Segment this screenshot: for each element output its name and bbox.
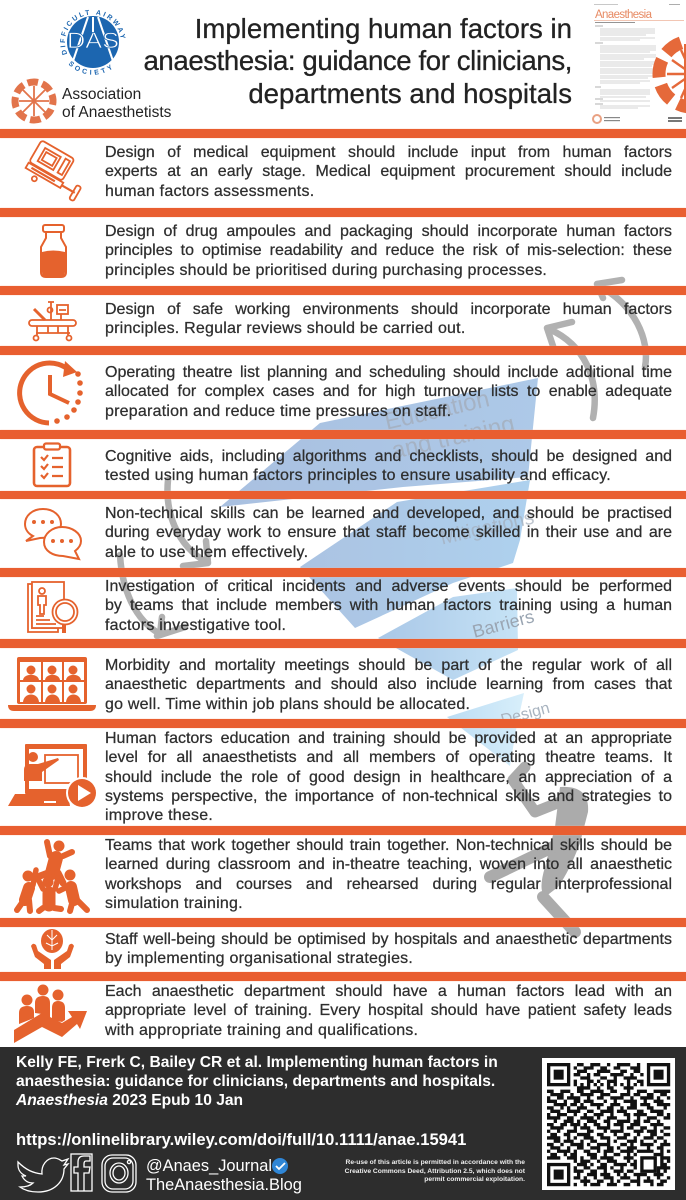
title: departments and hospitals xyxy=(248,78,572,109)
social handles: TheAnaesthesia.Blog xyxy=(146,1176,302,1194)
icon: drug vial xyxy=(41,225,66,277)
recommendation 5: cognitive aids: tested using human factors principles to ensure usability and efficacy. xyxy=(105,467,611,484)
licence note: permit commercial exploitation. xyxy=(424,1176,525,1183)
icon: twitter bird xyxy=(18,1158,68,1192)
recommendation 10: teams train together: simulation training. xyxy=(105,895,243,912)
icon: syringe pump xyxy=(22,140,92,203)
recommendation 1: medical equipment: experts at an early stage. Medical equipment procurement should include xyxy=(105,163,672,180)
recommendation 2: drug ampoules: principles to optimise readability and reduce the risk of mis-selection: these xyxy=(105,242,672,259)
icon: brain in caring hands xyxy=(31,929,74,969)
recommendation 11: staff well-being: by implementing organisational strategies. xyxy=(105,950,413,967)
recommendation 6: non-technical skills: during everyday work to ensure that staff become skilled in their use and are xyxy=(105,524,672,541)
recommendation 6: non-technical skills xyxy=(105,505,672,561)
recommendation 10: teams train together xyxy=(104,837,672,912)
recommendation 4: list planning: preparation and reduce time pressures on staff. xyxy=(105,403,451,420)
icon: speech bubbles xyxy=(25,509,81,559)
social handles: @Anaes_Journal xyxy=(146,1157,272,1175)
recommendation 7: critical incidents: Investigation of critical incidents and adverse events should be performed xyxy=(105,578,672,595)
recommendation 5: cognitive aids xyxy=(105,448,672,484)
icon: laptop with presenter and play button xyxy=(8,744,98,809)
title xyxy=(143,13,572,110)
logo: Difficult Airway Society: DIFFICULT AIRWAY xyxy=(60,10,126,56)
logo text: Association of Anaesthetists xyxy=(62,86,171,120)
citation: Anaesthesia 2023 Epub 10 Jan xyxy=(16,1092,243,1109)
icon: clipboard checklist xyxy=(34,444,70,486)
recommendation 9: education and training: should include the role of good design in healthcare, an appreciation of a xyxy=(105,769,672,786)
recommendation 1: medical equipment xyxy=(105,144,672,200)
licence note xyxy=(344,1159,525,1183)
social handles xyxy=(146,1157,302,1194)
recommendation 8: morbidity and mortality meetings: anaesthetic departments and should also include learning from cases that xyxy=(105,676,672,693)
icon: investigation document and magnifier xyxy=(28,582,78,633)
QR code xyxy=(542,1058,675,1190)
recommendation 12: human factors lead: with appropriate training and qualifications. xyxy=(105,1022,418,1039)
recommendation 6: non-technical skills: able to use them effectively. xyxy=(105,544,308,561)
title: anaesthesia: guidance for clinicians, xyxy=(143,45,572,76)
recommendation 3: working environments: Design of safe working environments should incorporate human factors xyxy=(105,301,672,318)
title: Implementing human factors in xyxy=(195,13,572,44)
logo: Association of Anaesthetists mark xyxy=(10,77,58,125)
icon: team with rising arrow xyxy=(14,984,87,1043)
recommendation 1: medical equipment: human factors assessments. xyxy=(105,183,314,200)
logo: Difficult Airway Society xyxy=(60,10,126,75)
recommendation 7: critical incidents: factors investigative tool. xyxy=(105,617,286,634)
recommendation 9: education and training: improve these. xyxy=(105,807,213,824)
recommendation 9: education and training: systems perspective, the importance of non-technical skills and strategies to xyxy=(105,788,672,805)
recommendation 8: morbidity and mortality meetings xyxy=(105,657,672,713)
recommendation 2: drug ampoules: principles should be prioritised during purchasing processes. xyxy=(105,262,547,279)
icon: instagram xyxy=(102,1155,136,1192)
recommendation 1: medical equipment: Design of medical equipment should include input from human factors xyxy=(105,144,672,161)
journal cover thumbnail: Anaesthesia xyxy=(595,9,653,21)
article link: https://onlinelibrary.wiley.com/doi/full/10.1111/anae.15941 xyxy=(16,1130,466,1149)
icon: hospital bed xyxy=(29,302,76,340)
licence note: Re-use of this article is permitted in accordance with the xyxy=(346,1159,525,1166)
recommendation 3: working environments: principles. Regular reviews should be carried out. xyxy=(105,320,466,337)
logo text: Association of Anaesthetists: Association xyxy=(62,86,141,103)
recommendation 12: human factors lead: Each anaesthetic department should have a human factors lead with an xyxy=(105,983,672,1000)
recommendation 9: education and training: Human factors education and training should be provided at an appropriate xyxy=(105,730,672,747)
background graphic: blue chevrons and grey arrows: Education xyxy=(382,385,492,436)
background graphic: blue chevrons and grey arrows: and training xyxy=(389,410,517,465)
background graphic: blue chevrons and grey arrows: Mitigations xyxy=(438,507,536,549)
recommendation 9: education and training: level for all anaesthetists and all members of operating theatre teams. It xyxy=(105,749,672,766)
recommendation 4: list planning: Operating theatre list planning and scheduling should include additional time xyxy=(105,364,672,381)
logo: Difficult Airway Society: SOCIETY xyxy=(68,61,112,75)
background graphic: blue chevrons and grey arrows: Design xyxy=(499,700,552,729)
recommendation 6: non-technical skills: Non-technical skills can be learned and developed, and should be practised xyxy=(105,505,672,522)
recommendation 3: working environments xyxy=(105,301,672,337)
recommendation 2: drug ampoules xyxy=(105,223,672,279)
footer panel xyxy=(0,1047,686,1200)
recommendation 7: critical incidents: by teams that include members with human factors training using a human xyxy=(105,597,672,614)
recommendation 12: human factors lead: appropriate level of training. Every hospital should have patient safety leads xyxy=(105,1002,672,1019)
recommendation 8: morbidity and mortality meetings: go well. Time within job plans should be allocated. xyxy=(105,696,470,713)
recommendation 9: education and training xyxy=(105,730,672,824)
icon: team human pyramid xyxy=(17,840,87,911)
icon: verified badge xyxy=(272,1158,288,1174)
recommendation 10: teams train together: learned during classroom and in-theatre teaching, woven into all anaesthetic xyxy=(105,856,672,873)
recommendation 4: list planning: allocated for complex cases and for high turnover lists to enable adequate xyxy=(105,383,672,400)
citation: Kelly FE, Frerk C, Bailey CR et al. Implementing human factors in xyxy=(16,1054,498,1071)
background graphic: blue chevrons and grey arrows: Barriers xyxy=(470,606,536,642)
recommendation 7: critical incidents xyxy=(105,578,672,634)
recommendation 11: staff well-being xyxy=(105,931,672,967)
recommendation 11: staff well-being: Staff well-being should be optimised by hospitals and anaesthetic departments xyxy=(105,931,672,948)
recommendation 12: human factors lead xyxy=(104,983,672,1039)
recommendation 4: list planning xyxy=(105,364,672,420)
icon: laptop with video grid xyxy=(8,657,96,711)
icon: facebook xyxy=(71,1154,92,1191)
icon: clock with time arrow xyxy=(20,361,83,424)
citation xyxy=(16,1054,498,1109)
logo: Difficult Airway Society: DAS xyxy=(67,28,119,53)
recommendation 8: morbidity and mortality meetings: Morbidity and mortality meetings should be part of the regular work of all xyxy=(105,657,672,674)
recommendation 5: cognitive aids: Cognitive aids, including algorithms and checklists, should be designed and xyxy=(105,448,672,465)
recommendation 10: teams train together: workshops and courses and rehearsed during regular interprofessional xyxy=(105,876,672,893)
logo text: Association of Anaesthetists: of Anaesthetists xyxy=(62,104,171,120)
citation: anaesthesia: guidance for clinicians, departments and hospitals. xyxy=(16,1073,495,1090)
recommendation 10: teams train together: Teams that work together should train together. Non-technical skills should be xyxy=(105,837,672,854)
licence note: Creative Commons Deed, Attribution 2.5, which does not xyxy=(345,1168,525,1175)
recommendation 2: drug ampoules: Design of drug ampoules and packaging should incorporate human factors xyxy=(105,223,672,240)
journal cover thumbnail xyxy=(590,1,686,128)
